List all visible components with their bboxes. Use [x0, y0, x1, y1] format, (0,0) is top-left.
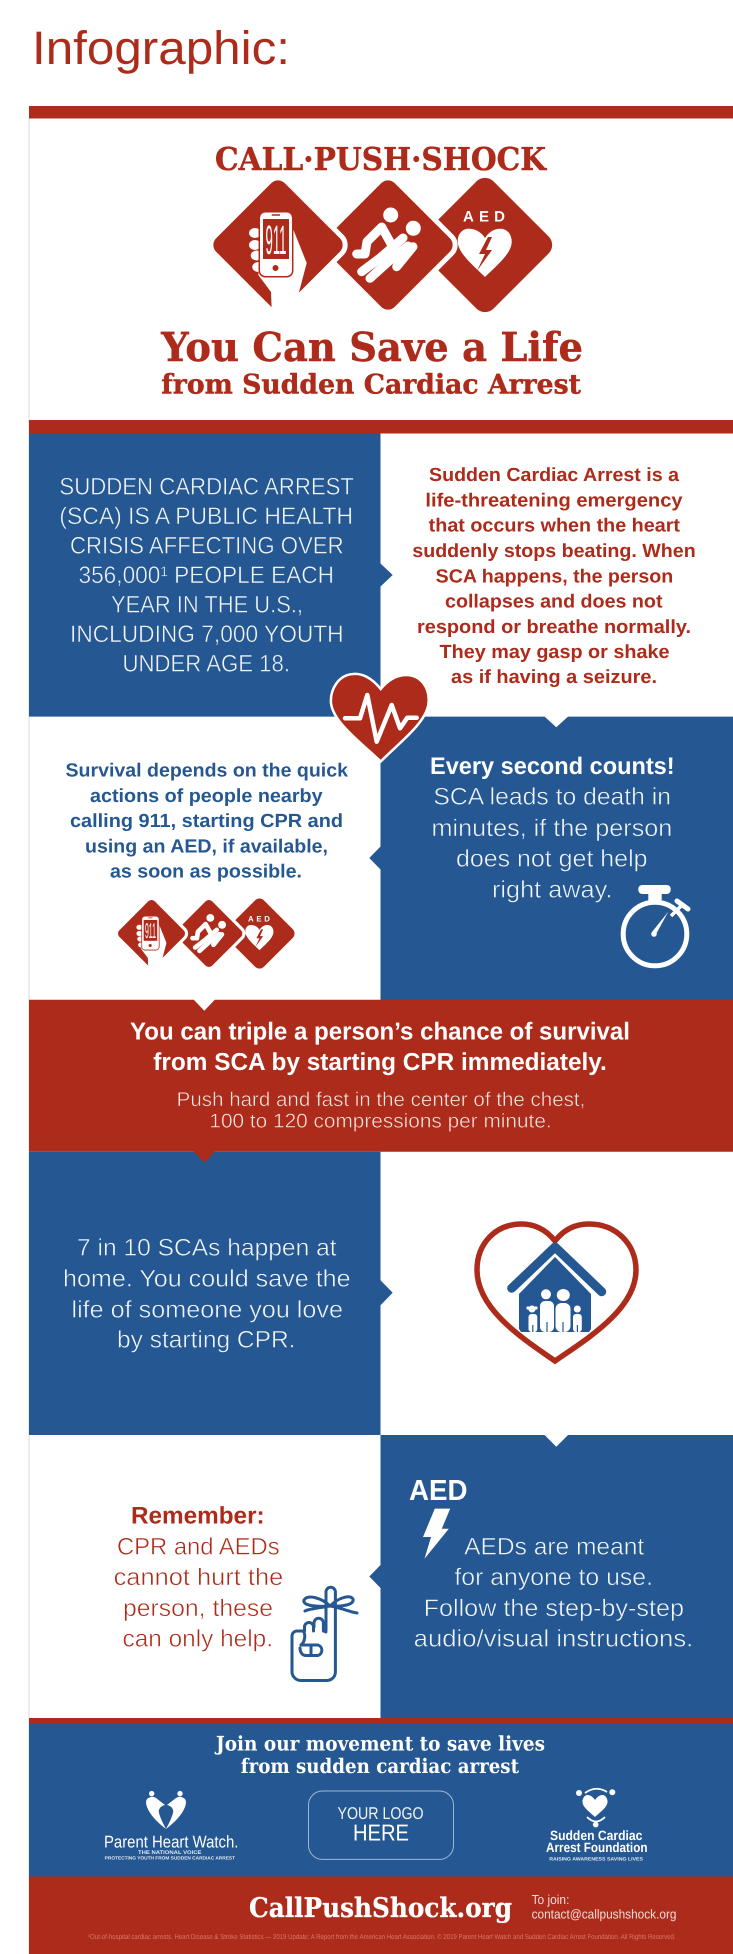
icon: small phone diamond: [114, 896, 189, 975]
text block: triple survival: Push hard and fast in the center of the chest,: [177, 1089, 585, 1111]
label: AED: AED: [409, 1475, 468, 1507]
panel: footer: [29, 1876, 733, 1954]
panel: SCA definition: life-threatening emergency: [425, 490, 683, 512]
text block: every second counts: Every second counts!: [430, 753, 675, 780]
text block: 7 in 10 SCAs: [63, 1235, 351, 1354]
contact: To join:: [532, 1892, 569, 1907]
panel: SCA definition: They may gasp or shake: [440, 642, 670, 663]
text block: triple survival: [130, 1018, 630, 1133]
panel: 7 in 10 at home: [29, 1152, 393, 1435]
text block: 7 in 10 SCAs: home. You could save the: [63, 1266, 351, 1293]
contact: contact@callpushshock.org: [532, 1906, 676, 1921]
icon: phone diamond: 911: [266, 217, 286, 263]
text block: survival depends: as soon as possible.: [110, 862, 302, 883]
icon: small AED diamond: AED: [248, 915, 270, 923]
lower red bar: [29, 420, 733, 434]
logo: Parent Heart Watch: Parent Heart Watch.: [104, 1832, 238, 1851]
logo placeholder: your logo here: [308, 1791, 454, 1859]
logo: Sudden Cardiac Arrest Foundation: [546, 1789, 648, 1863]
text block: 7 in 10 SCAs: by starting CPR.: [117, 1327, 296, 1354]
top red bar: [29, 106, 733, 118]
panel: masthead: [29, 106, 733, 434]
logo: Parent Heart Watch: THE NATIONAL VOICE: [138, 1850, 202, 1856]
icon group: call push shock diamonds: [206, 173, 557, 325]
icon: small CPR diamond: [171, 896, 247, 971]
panel: every second counts: [369, 717, 733, 1000]
logo: Parent Heart Watch: [104, 1791, 238, 1861]
icon: CPR diamond: [316, 173, 460, 317]
heading: join our movement: [214, 1731, 545, 1778]
icon: phone diamond: [206, 173, 350, 325]
headline: call push shock: CALL·PUSH·SHOCK: [215, 141, 548, 178]
logo: Parent Heart Watch: PROTECTING YOUTH FROM SUDDEN CARDIAC ARREST: [105, 1856, 235, 1861]
text block: remember: CPR and AEDs: [117, 1533, 280, 1560]
text block: survival depends: [66, 761, 348, 883]
panel: SCA definition: suddenly stops beating. When: [412, 541, 696, 562]
logo: Sudden Cardiac Arrest Foundation: Sudden Cardiac: [550, 1828, 643, 1843]
panel: AEDs are meant for anyone: [369, 1435, 733, 1718]
logo: Sudden Cardiac Arrest Foundation: Arrest Foundation: [546, 1840, 648, 1855]
headline: you can save a life: You Can Save a Life: [160, 324, 583, 371]
text block: SCA statistics: [59, 474, 354, 677]
text block: every second counts: SCA leads to death in: [433, 784, 671, 811]
text block: remember: person, these: [123, 1595, 273, 1622]
text block: remember: [114, 1503, 283, 1653]
contact: [532, 1892, 676, 1921]
text block: SCA statistics: YEAR IN THE U.S.,: [111, 592, 303, 618]
panel: SCA definition: [412, 465, 696, 688]
icon: lightning bolt: [423, 1509, 450, 1559]
panel: SCA definition: as if having a seizure.: [451, 667, 657, 688]
text block: survival depends: using an AED, if available,: [85, 836, 328, 858]
text block: AED instructions: AEDs are meant: [464, 1533, 645, 1560]
text block: survival depends: Survival depends on the quick: [66, 761, 348, 782]
text block: every second counts: [430, 753, 675, 904]
logo: Sudden Cardiac Arrest Foundation: RAISING AWARENESS SAVING LIVES: [549, 1857, 644, 1863]
icon: stopwatch: [623, 885, 688, 966]
text block: triple survival: from SCA by starting CPR immediately.: [153, 1049, 607, 1076]
icon: small AED diamond: [222, 896, 297, 971]
text block: 7 in 10 SCAs: life of someone you love: [72, 1296, 343, 1323]
text block: triple survival: You can triple a person’s chance of survival: [130, 1018, 630, 1045]
icon: AED diamond: [413, 173, 557, 317]
text block: AED instructions: Follow the step-by-step: [424, 1595, 684, 1622]
text block: survival depends: calling 911, starting CPR and: [70, 811, 343, 832]
text block: remember: Remember:: [131, 1503, 265, 1530]
panel: SCA definition: collapses and does not: [445, 592, 663, 612]
icon: heart with house and family: [477, 1224, 636, 1361]
icon: small phone diamond: 911: [145, 919, 156, 943]
icon group: small call push shock diamonds: [114, 896, 297, 975]
panel: SCA definition: SCA happens, the person: [436, 566, 673, 587]
website link: CallPushShock.org: [249, 1893, 512, 1924]
text block: AED instructions: [414, 1533, 693, 1653]
text block: every second counts: right away.: [492, 877, 612, 904]
heading: join our movement: Join our movement to save lives: [214, 1731, 545, 1755]
panel: survival depends: [66, 761, 348, 975]
text block: 7 in 10 SCAs: 7 in 10 SCAs happen at: [77, 1235, 337, 1262]
text block: SCA statistics: SUDDEN CARDIAC ARREST: [59, 474, 354, 501]
icon: AED diamond: AED: [463, 209, 505, 226]
icon: heart with pulse line: [331, 674, 429, 762]
text block: triple survival: 100 to 120 compressions per minute.: [209, 1111, 552, 1133]
panel: SCA definition: Sudden Cardiac Arrest is a: [429, 465, 679, 486]
family silhouettes: [526, 1289, 582, 1332]
text block: AED instructions: audio/visual instructions.: [414, 1626, 693, 1653]
panel: join our movement: [29, 1718, 733, 1877]
text block: remember: cannot hurt the: [114, 1564, 283, 1591]
text block: every second counts: minutes, if the person: [432, 815, 672, 842]
logo placeholder: your logo here: YOUR LOGO: [338, 1804, 424, 1823]
text block: SCA statistics: INCLUDING 7,000 YOUTH: [70, 621, 344, 648]
panel: SCA public health crisis: [29, 434, 393, 717]
panel: triple chance of survival: [29, 1000, 733, 1163]
text block: remember: can only help.: [122, 1626, 273, 1653]
panel: remember: [114, 1503, 357, 1680]
text block: every second counts: does not get help: [456, 846, 648, 873]
subheading: from sudden cardiac arrest: from Sudden Cardiac Arrest: [161, 369, 582, 400]
text block: SCA statistics: CRISIS AFFECTING OVER: [70, 533, 344, 560]
heading: join our movement: from sudden cardiac arrest: [241, 1754, 520, 1778]
page heading: Infographic:: [32, 21, 290, 74]
logo placeholder: your logo here: HERE: [353, 1819, 409, 1845]
icon: finger with ribbon: [292, 1587, 357, 1680]
panel: SCA definition: respond or breathe normally.: [417, 617, 691, 638]
text block: SCA statistics: UNDER AGE 18.: [122, 650, 290, 677]
text block: survival depends: actions of people nearby: [90, 786, 323, 807]
text block: SCA statistics: 356,000¹ PEOPLE EACH: [78, 562, 334, 589]
panel: SCA definition: that occurs when the heart: [429, 516, 681, 537]
text block: AED instructions: for anyone to use.: [454, 1564, 653, 1591]
text block: SCA statistics: (SCA) IS A PUBLIC HEALTH: [59, 503, 353, 530]
